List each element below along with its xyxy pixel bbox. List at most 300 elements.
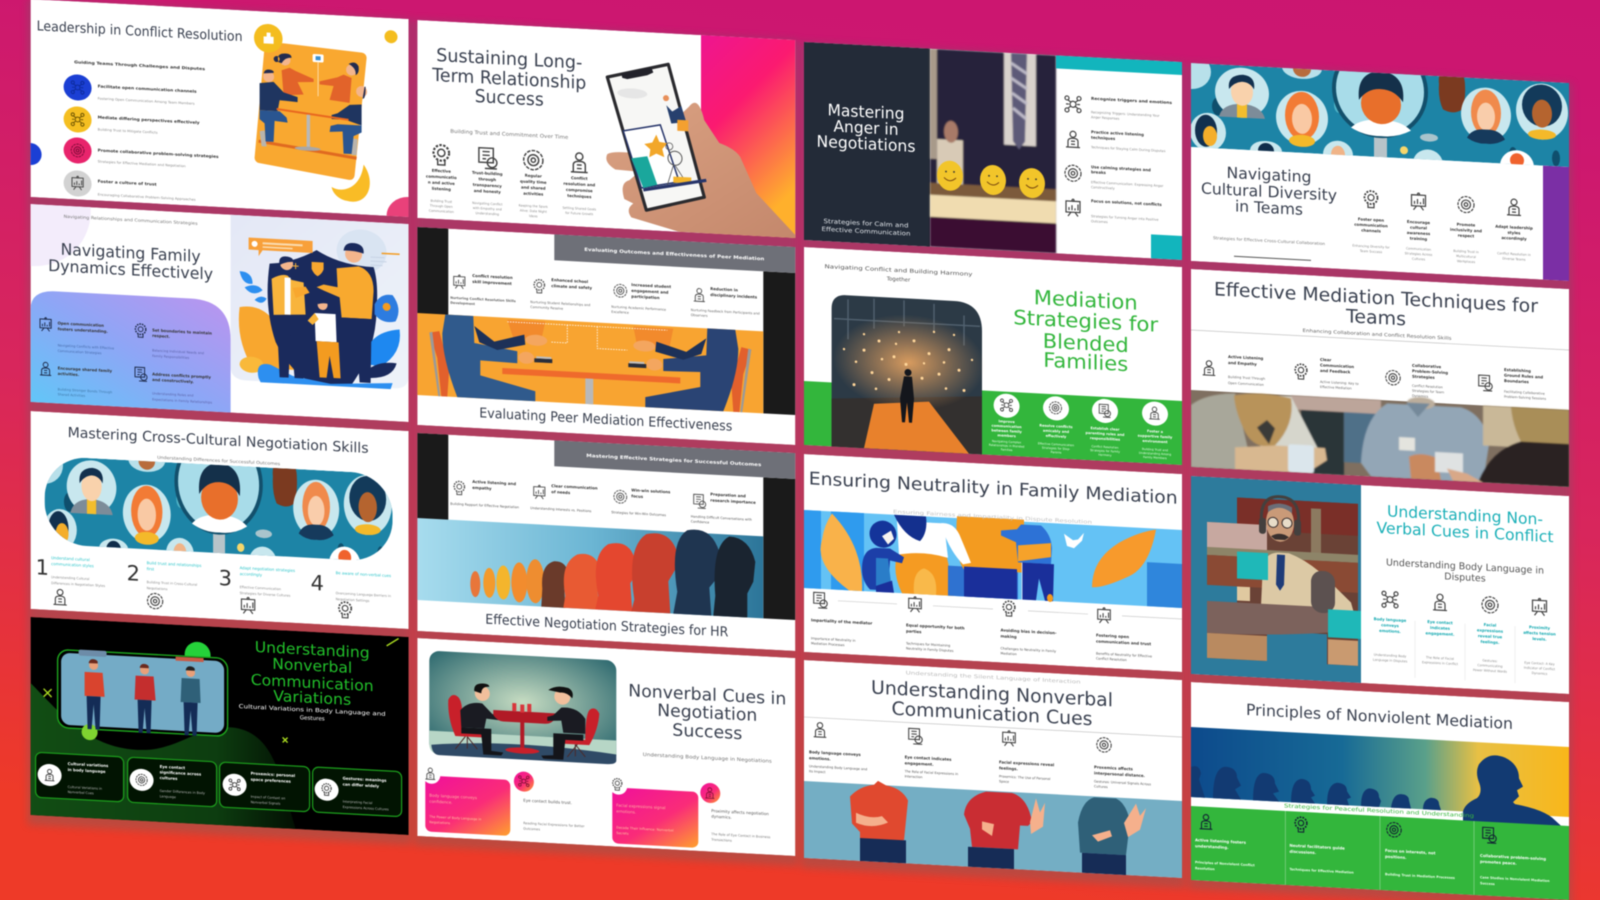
image: suit and smiling eggs — [930, 49, 1056, 253]
image: row of coloured heads — [417, 515, 763, 618]
panel: gradient — [701, 35, 795, 238]
four principles: making — [1000, 633, 1017, 639]
slide: Evaluating Peer Mediation Effectiveness — [417, 227, 795, 445]
four icon columns: techniques — [567, 193, 592, 199]
four outcomes: Increased student — [631, 282, 671, 289]
four icon columns: Setting Shared Goals — [563, 206, 596, 211]
four principles: Importance of Neutrality in — [811, 636, 856, 643]
subtitle: Strategies for Calm and — [823, 218, 909, 230]
four icon columns: with Empathy and — [473, 206, 502, 211]
four practices: channels — [1361, 228, 1381, 234]
four cues: affects tension — [1523, 630, 1556, 637]
four principles: promotes peace. — [1480, 859, 1517, 866]
numbered items: Understand cultural — [51, 555, 90, 562]
teal bars — [1056, 55, 1182, 260]
four cues: emotions. — [809, 755, 831, 761]
four techniques: Collaborative — [1412, 363, 1441, 369]
four icon columns: communicatio — [426, 173, 457, 180]
four techniques: Strategies for Team — [1412, 389, 1444, 394]
four tips with pink cards: Negotiations — [429, 820, 450, 825]
four strategies: Clear communication — [551, 483, 598, 491]
four outcomes — [450, 272, 760, 322]
four strategies in green band: Family Members — [1143, 455, 1167, 460]
four strategies in green band: Parents — [1051, 450, 1062, 455]
four tips with pink cards: dynamics. — [711, 814, 732, 820]
four cues: expressions — [1477, 627, 1504, 634]
four tips with pink cards: Proximity affects negotiation — [711, 808, 769, 816]
slide: Principles of Nonviolent Mediation — [1191, 682, 1569, 900]
four cues: Space — [999, 779, 1009, 784]
four techniques — [1203, 351, 1546, 405]
four principles: Active listening fosters — [1195, 837, 1246, 845]
four icon columns: activities — [523, 191, 544, 197]
panel: gradient tips: Navigating Conflicts with Effective — [58, 343, 114, 350]
four techniques: Communication — [1320, 362, 1354, 369]
four cues: feelings. — [1481, 639, 1500, 645]
title: Evaluating Peer Mediation Effectiveness — [479, 405, 732, 435]
four strategies in green band: Strategies for Family — [1090, 448, 1120, 454]
image: hand holding phone — [606, 61, 795, 238]
decor: dark green blob — [31, 683, 296, 829]
four techniques: Active Listening: Key to — [1320, 380, 1359, 386]
subtitle: Building Trust and Commitment Over Time — [450, 129, 568, 141]
slide: Mediation Strategies for Blended Families — [804, 247, 1182, 465]
title line three: Communication — [251, 671, 374, 695]
slide: Ensuring Neutrality in Family Mediation — [804, 454, 1182, 672]
image: family with leaves on blue — [804, 508, 1182, 609]
four icon columns: through — [479, 176, 496, 182]
four tips: Constructively — [1091, 185, 1115, 190]
subtitle line two: Together — [886, 276, 911, 284]
four tips: Focus on solutions, not conflicts — [1091, 198, 1162, 207]
image: silhouettes facing speaker — [1191, 727, 1569, 833]
four strategies in green band: communication — [992, 424, 1022, 429]
title line two: Term Relationship — [431, 65, 586, 94]
four practices: training — [1410, 236, 1427, 242]
numbered items: Building Trust in Cross-Cultural — [147, 580, 197, 587]
header band — [554, 440, 795, 479]
panel: gradient tips: Balancing Individual Needs and — [152, 348, 204, 355]
four principles — [811, 591, 1182, 665]
four strategies: Building Rapport for Effective Negotiation — [450, 502, 519, 509]
four techniques: Clear — [1320, 357, 1331, 362]
four icon columns: and honesty — [474, 188, 501, 194]
four outlined cards: Cultural variations — [68, 761, 108, 768]
four strategies in green band: Navigating Complex — [992, 439, 1021, 445]
four cues: Interaction — [905, 774, 922, 779]
four strategies in green band: Effective Communication — [1038, 441, 1074, 447]
four icon columns: Communication — [429, 209, 454, 214]
four practices: cultural — [1410, 225, 1427, 231]
title line two: Teams — [1345, 306, 1406, 330]
slide: Navigating Family Dynamics Effectively — [31, 204, 409, 422]
four icon columns: Understanding — [476, 211, 499, 216]
title line two: Nonverbal — [272, 655, 352, 677]
numbered items: communication styles — [51, 561, 94, 568]
four practices: Diverse Teams — [1502, 257, 1526, 262]
title: Mastering Cross-Cultural Negotiation Skills — [68, 425, 369, 457]
title line two: Communication Cues — [892, 699, 1092, 730]
four principles: Mediation Processes — [811, 641, 845, 647]
image: avatars banner — [1171, 33, 1569, 185]
title line three: Negotiations — [816, 132, 915, 156]
four outlined cards: Language — [160, 794, 176, 799]
title line three: in Teams — [1235, 197, 1303, 219]
four cues: engagement. — [1425, 630, 1455, 637]
four icon columns: Regular — [525, 173, 542, 179]
title: Mastering — [827, 100, 904, 123]
four practices: Building Trust in — [1453, 249, 1479, 254]
panel: dark title panel — [804, 42, 930, 247]
panel: gradient tips: Shared Activities — [58, 392, 86, 398]
four outlined cards: Expressions Across Cultures — [343, 805, 389, 811]
title: Navigating — [1226, 164, 1311, 186]
black side bars — [417, 227, 795, 415]
slide: Understanding Nonverbal Communication Cues — [804, 660, 1182, 878]
four outlined cards: Proxemics: personal — [251, 771, 295, 778]
four techniques: and Empathy — [1228, 360, 1257, 367]
four strategies: focus — [631, 493, 644, 499]
four icon columns: quality time — [520, 178, 547, 185]
four outcomes: Nurturing Academic Performance — [611, 305, 666, 312]
numbered items: Differences in Negotiation Styles — [51, 581, 105, 588]
panel: gradient tips: Expectations in Family Relationships — [152, 397, 212, 405]
four icon columns: for Future Growth — [565, 211, 593, 216]
four icon columns: Building Trust — [430, 199, 452, 204]
numbered items: 3 — [219, 565, 232, 591]
numbered items: 1 — [36, 554, 49, 580]
four icon columns: Trust-building — [472, 170, 503, 177]
green band — [1191, 806, 1569, 900]
image: man in room of lights — [832, 294, 985, 455]
four cues: Body language conveys — [809, 749, 861, 757]
four techniques: Dynamics — [1412, 394, 1429, 399]
illustration: three people in frame — [58, 634, 228, 747]
four outlined cards: space preferences — [251, 777, 292, 784]
four principles: Benefits of Neutrality for Effective — [1096, 651, 1152, 658]
four outlined cards: Interpreting Facial — [343, 800, 372, 805]
panel: teal — [1191, 476, 1361, 683]
four techniques: Facilitating Collaborative — [1504, 390, 1545, 396]
subtitle: Understanding Body Language in — [1386, 557, 1544, 577]
four tips with pink cards: confidence. — [429, 799, 452, 805]
four strategies in green band: Improve — [998, 419, 1015, 424]
subtitle: Understanding the Silent Language of Interaction — [906, 670, 1081, 686]
four principles: Impartiality of the mediator — [811, 617, 872, 626]
four techniques: Effective Mediation — [1320, 385, 1352, 391]
four practices: respect — [1458, 233, 1474, 239]
four tips with pink cards: Reading Facial Expressions for Better — [523, 821, 585, 828]
title: Understanding — [255, 638, 370, 662]
four cues: indicates — [1430, 625, 1451, 631]
four tips: Anger Responses — [1091, 115, 1120, 121]
title: Effective Negotiation Strategies for HR — [485, 612, 728, 640]
four practices: styles — [1508, 230, 1521, 235]
four practices: accordingly — [1501, 235, 1527, 241]
four outlined cards: Gestures: meanings — [343, 776, 386, 783]
four principles: Focus on interests, not — [1385, 848, 1435, 855]
teal squares — [1237, 551, 1361, 639]
title line two: Anger in — [833, 117, 898, 139]
four principles: Neutrality in Family Disputes — [906, 646, 954, 653]
four icon columns: listening — [432, 186, 451, 192]
four strategies in green band: members — [997, 433, 1016, 438]
four cues: reveal true — [1478, 633, 1502, 639]
four cues: Dynamics — [1532, 671, 1548, 676]
four techniques: Strategies — [1412, 374, 1435, 380]
four cues: Facial — [1484, 622, 1496, 628]
four strategies in green band: effectively — [1046, 434, 1067, 439]
four tips: Recognizing Triggers: Understanding Your — [1091, 110, 1160, 118]
decor: sparkles — [42, 637, 400, 744]
four outlined cards: Gender Differences in Body — [160, 789, 205, 795]
four cues: Its Impact — [809, 769, 826, 774]
list of four items — [64, 74, 219, 204]
four tips: techniques — [1091, 135, 1116, 141]
subtitle line two: Gestures — [300, 715, 325, 723]
four strategies in green band: Families — [1001, 447, 1013, 452]
four practices: inclusivity and — [1450, 227, 1482, 233]
four cues — [1373, 590, 1556, 685]
numbered items: Be aware of non-verbal cues — [336, 570, 391, 578]
four techniques: Problem-Solving Sessions — [1504, 395, 1546, 401]
four strategies: Confidence — [691, 519, 709, 524]
four practices: Adapt leadership — [1495, 224, 1533, 231]
four cues: Eye contact indicates — [905, 754, 951, 762]
slide: Mastering Anger in Negotiations — [804, 42, 1182, 260]
header band: Evaluating Outcomes and Effectiveness of Peer Mediation — [584, 247, 764, 262]
numbered items: accordingly — [240, 571, 263, 577]
title line two: Dynamics Effectively — [48, 256, 213, 284]
four outcomes: skill improvement — [472, 279, 512, 286]
four techniques: Problem-Solving — [1412, 368, 1448, 375]
numbered items: Overcoming Language Barriers in — [336, 591, 391, 598]
four principles: Collaborative problem-solving — [1480, 853, 1546, 861]
four principles — [1195, 806, 1550, 899]
decor: blue half circle — [30, 142, 42, 166]
numbered items: Build trust and relationships — [147, 560, 201, 568]
slide: Sustaining Long-Term Relationship Success — [417, 20, 795, 238]
four icon columns: resolution and — [563, 181, 595, 187]
four outcomes: climate and safety — [551, 283, 592, 290]
four strategies: research importance — [710, 498, 756, 505]
four tips: Strategies for Turning Anger into Positive — [1091, 214, 1158, 222]
four outlined cards: Nonverbal Cues — [68, 790, 94, 795]
four tips with pink cards: Outcomes — [523, 827, 540, 832]
four cues: Eye Contact: A Key — [1524, 661, 1555, 666]
four outcomes: engagement and — [631, 288, 669, 295]
four cues: Facial expressions reveal — [999, 759, 1054, 767]
title: Principles of Nonviolent Mediation — [1246, 701, 1513, 733]
four practices: Foster open — [1358, 216, 1384, 223]
four principles: Challenges to Neutrality in Family — [1000, 646, 1056, 653]
four cues: Proxemics affects — [1094, 764, 1133, 771]
four cues: The Role of Facial — [1426, 655, 1454, 661]
four principles: Equal opportunity for both — [906, 622, 965, 631]
four tips with pink cards: Body language conveys — [429, 793, 477, 800]
slide: Navigating Cultural Diversity in Teams — [1171, 33, 1569, 281]
subtitle: Strategies for Effective Cross-Cultural Collaboration — [1213, 235, 1326, 246]
numbered items: Negotiation Settings — [336, 597, 370, 603]
four icon columns: Ideas — [529, 214, 538, 218]
four strategies in green band: Foster a — [1147, 429, 1163, 434]
title line two: Strategies for — [1013, 305, 1159, 337]
subtitle line two: Disputes — [1444, 571, 1486, 585]
four cues: conveys — [1381, 622, 1400, 628]
four strategies: Preparation and — [710, 492, 746, 498]
four outlined cards: significance across — [160, 769, 202, 777]
four tips: Recognize triggers and emotions — [1091, 96, 1173, 105]
four outlined cards: can differ widely — [343, 782, 379, 788]
four icon columns: Keeping the Spark — [519, 203, 548, 209]
four principles: discussions. — [1290, 849, 1317, 855]
four tips with pink cards: Transactions — [710, 838, 732, 843]
four tips with pink cards: Eye contact builds trust. — [523, 798, 572, 805]
four cues: Proxemics: The Use of Personal — [999, 774, 1050, 781]
four outlined cards: Cultural Variations in — [68, 785, 102, 791]
four strategies: empathy — [472, 485, 492, 491]
green band — [804, 381, 1182, 465]
title line four: Variations — [273, 687, 351, 709]
slide: Understanding Non-Verbal Cues in Conflict — [1191, 476, 1569, 694]
four cues: Expressions in Conflict — [1422, 660, 1459, 666]
four tips: Use calming strategies and — [1091, 164, 1151, 172]
slide: Mastering Cross-Cultural Negotiation Skills — [26, 411, 409, 629]
title: Mediation — [1034, 285, 1138, 315]
decor: yellow dot — [384, 30, 398, 44]
subtitle: Understanding Differences for Successful Outcomes — [157, 455, 280, 466]
four strategies in green band: Relationships in Blended — [989, 443, 1025, 449]
panel: gradient tips: and constructively. — [152, 377, 194, 384]
title line three: Success — [475, 86, 544, 111]
subtitle: Navigating Relationships and Communication Strategies — [64, 214, 198, 226]
panel: gradient tips: activities. — [58, 371, 80, 377]
four techniques: Building Trust Through — [1228, 375, 1265, 381]
four cues: engagement. — [905, 760, 934, 767]
four cues: Understanding Body — [1374, 653, 1406, 658]
four cues: Language in Disputes — [1373, 658, 1408, 663]
four strategies in green band: Resolve conflicts — [1039, 423, 1073, 429]
four strategies in green band: between family — [991, 428, 1023, 434]
title line three: Blended — [1043, 329, 1129, 357]
four tips with pink cards: The Power of Body Language in — [429, 815, 481, 821]
four outcomes: participation — [631, 294, 660, 300]
image: office meeting photo — [1191, 385, 1569, 487]
four icon columns: Through Open — [429, 204, 453, 209]
four icon columns: and shared — [521, 184, 546, 191]
four strategies in green band: Strategies for Step- — [1042, 446, 1070, 451]
subtitle: Ensuring Fairness and Impartiality in Dispute Resolution — [893, 509, 1092, 526]
four techniques: Conflict Resolution — [1412, 384, 1443, 389]
subtitle: Guiding Teams Through Challenges and Disputes — [74, 59, 206, 71]
black side bars — [417, 433, 795, 620]
four practices: Enhancing Diversity for — [1352, 244, 1390, 250]
title: Ensuring Neutrality in Family Mediation — [809, 469, 1178, 509]
slide: Leadership in Conflict Resolution — [20, 0, 409, 217]
four strategies in green band: parenting roles and — [1086, 431, 1125, 437]
four tips: Practice active listening — [1091, 129, 1144, 137]
four practices: Cultures — [1412, 257, 1425, 261]
four practices: Strategies Across — [1405, 251, 1433, 257]
four strategies in green band: responsibilities — [1090, 436, 1120, 442]
four icon columns — [426, 144, 596, 221]
four cues: Power Without Words — [1473, 668, 1507, 674]
four tips with pink cards: The Role of Eye Contact in Business — [711, 832, 770, 839]
four outcomes: Nurturing Conflict Resolution Skills — [450, 296, 516, 303]
title: Understanding Nonverbal — [871, 678, 1113, 711]
subtitle: Understanding Body Language in Negotiations — [643, 752, 772, 765]
four tips: Outcomes — [1091, 219, 1108, 224]
title: Sustaining Long- — [436, 45, 582, 74]
title line three: Success — [672, 721, 742, 744]
four icon columns: Alive: Date Night — [520, 208, 548, 214]
list of four items: Mediate differing perspectives effectively — [98, 115, 200, 125]
four outcomes: disciplinary incidents — [710, 292, 758, 300]
four principles: Neutral facilitators guide — [1290, 843, 1345, 851]
four practices: awareness — [1407, 230, 1431, 236]
four strategies: Active listening and — [472, 479, 516, 486]
panel: gradient tips — [31, 290, 231, 413]
four techniques: Ground Rules and — [1504, 372, 1543, 380]
purple strip — [1543, 166, 1569, 281]
panel: gradient tips: Family Responsibilities — [152, 354, 190, 360]
four outcomes: Nurturing Feedback from Participants and — [691, 308, 760, 316]
four strategies in green band: Understanding Among — [1139, 451, 1171, 456]
panel: gradient tips: Address conflicts promptly — [152, 371, 211, 380]
list of four items: Encouraging Collaborative Problem-Solving Approaches — [98, 193, 196, 202]
slide: Effective Mediation Techniques for Teams — [1191, 269, 1569, 487]
image: avatars pill — [44, 457, 394, 561]
four outlined cards: Nonverbal Signals — [251, 800, 281, 806]
panel: gradient tips: respect. — [152, 333, 171, 339]
four principles: Fostering open — [1096, 632, 1129, 639]
four icon columns: compromise — [566, 187, 593, 193]
four strategies: Win-win solutions — [631, 487, 670, 494]
list of four items: Building Trust to Mitigate Conflicts — [98, 128, 158, 135]
four icon columns: transparency — [473, 182, 502, 189]
title line two: Cultural Diversity — [1201, 180, 1337, 205]
title: Navigating Family — [61, 240, 201, 266]
list of four items: Strategies for Effective Mediation and Negotiation — [98, 160, 186, 168]
subtitle: Navigating Conflict and Building Harmony — [824, 264, 974, 278]
slide: Understanding Nonverbal Communication Variations — [31, 617, 409, 835]
panel: gradient tips: Encourage shared family — [58, 365, 112, 373]
four cues: levels. — [1532, 636, 1547, 642]
four principles: Conflict Resolution — [1096, 656, 1127, 662]
title: Nonverbal Cues in — [628, 681, 786, 710]
image: businessmen at chess table — [429, 651, 616, 765]
four outcomes: Enhanced school — [551, 277, 588, 284]
title: Understanding Non- — [1387, 502, 1543, 529]
four strategies in green band: amicably and — [1043, 429, 1070, 434]
list of four items: Foster a culture of trust — [98, 179, 157, 187]
four tips with pink cards — [422, 765, 771, 852]
four techniques: Boundaries — [1504, 378, 1529, 384]
four strategies — [450, 478, 756, 527]
numbered items: first — [147, 566, 155, 572]
four practices: Workplaces — [1457, 259, 1475, 264]
four cues: Gestures: Universal Signals Across — [1094, 779, 1151, 786]
numbered items — [36, 554, 391, 622]
four outlined cards: cultures — [160, 775, 178, 781]
four strategies: Handling Difficult Conversations with — [691, 514, 752, 522]
four principles: Techniques for Maintaining — [906, 641, 950, 648]
four cues — [809, 720, 1151, 791]
four cues: feelings. — [999, 765, 1018, 771]
four tips: Techniques for Staying Calm During Disputes — [1090, 145, 1166, 153]
four practices: communication — [1354, 222, 1388, 228]
four tips with pink cards: emotions. — [616, 809, 636, 815]
